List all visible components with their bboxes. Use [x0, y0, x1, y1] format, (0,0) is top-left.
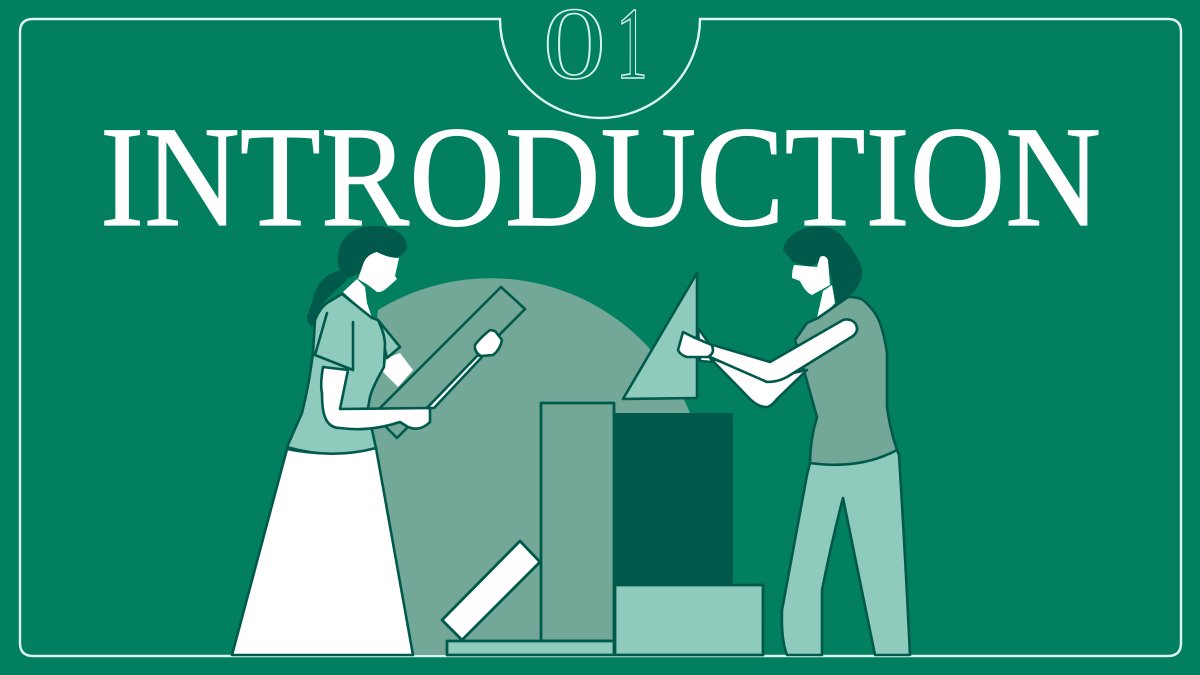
left woman — [232, 226, 525, 655]
hair — [783, 227, 862, 307]
board — [380, 287, 525, 438]
pants — [782, 450, 910, 655]
dark block — [614, 413, 733, 585]
right woman — [623, 227, 910, 655]
short sleeve — [315, 313, 353, 370]
face — [792, 256, 830, 295]
raised hand — [475, 330, 502, 356]
skirt — [232, 448, 413, 655]
shirt — [795, 297, 897, 465]
building blocks — [442, 403, 763, 655]
far arm — [427, 355, 482, 408]
hand — [678, 332, 713, 357]
large light block — [615, 585, 763, 655]
white tilted block — [442, 541, 540, 640]
face — [358, 252, 399, 292]
back arm — [710, 358, 807, 407]
hair — [338, 226, 407, 278]
ponytail — [307, 270, 347, 327]
title: INTRODUCTION — [100, 98, 1101, 257]
triangle — [623, 273, 697, 399]
back fingers — [698, 328, 712, 362]
neck — [817, 285, 835, 320]
section number — [543, 0, 648, 101]
near arm — [321, 367, 430, 429]
background arch — [366, 278, 690, 655]
tall block — [541, 403, 614, 641]
front arm — [710, 319, 857, 382]
far forearm — [383, 353, 413, 387]
low flat block — [447, 641, 614, 655]
neck — [343, 279, 372, 318]
far sleeve — [378, 320, 400, 358]
shirt — [287, 294, 385, 454]
